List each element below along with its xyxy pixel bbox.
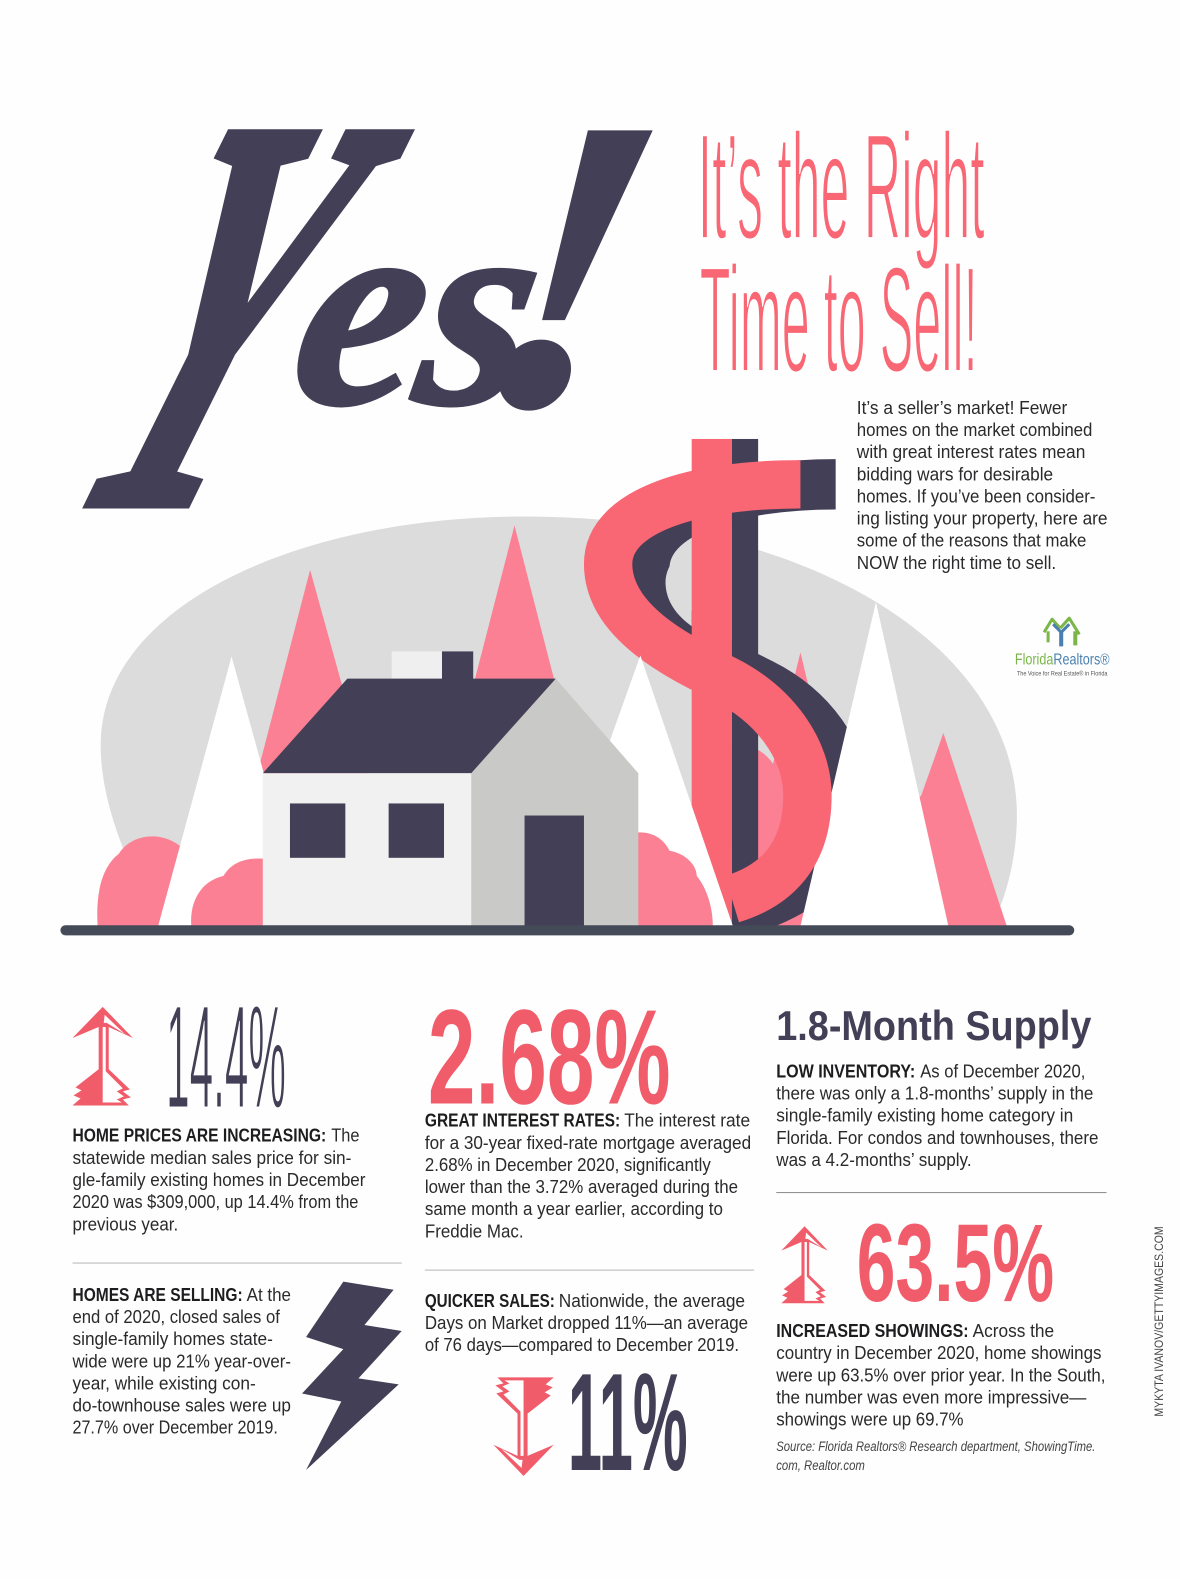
text: quicker sales: Nationwide, the average [559,1291,745,1311]
white tree tall right [800,602,948,926]
pink tree far right [805,733,1007,926]
text: home prices are increasing [72,1126,365,1234]
dollar sign bar [692,439,732,926]
round bush behind dollar [698,745,782,846]
text: increased showings: country in December 2020, home showings [776,1343,1101,1363]
house side wall [471,679,638,926]
text: homes are selling: do-townhouse sales were up [72,1396,291,1416]
text: home prices are increasing: HOME PRICES ARE INCREASING: [72,1126,326,1146]
right bush [634,832,713,926]
text: quicker sales [425,1291,748,1355]
intro paragraph: ing listing your property, here are [857,509,1108,529]
text: increased showings [775,1321,1105,1430]
text: homes are selling [72,1285,291,1438]
icon: up arrow [72,1007,133,1105]
photo credit: MYKYTA IVANOV/GETTYIMAGES.COM [1154,1226,1166,1417]
text: homes are selling: year, while existing con- [72,1373,256,1393]
title: Yes! script word: Y [13,1,464,626]
pink tree left of house [252,570,373,795]
second left bush [191,859,267,926]
text: increased showings: INCREASED SHOWINGS: [776,1321,969,1341]
text: home prices are increasing: previous year. [72,1214,178,1234]
text: quicker sales: of 76 days—compared to December 2019. [425,1335,739,1355]
text: increased showings: Across the [973,1321,1054,1341]
text: increased showings: were up 63.5% over prior year. In the South, [775,1365,1105,1385]
dollar sign shadow bar [732,439,758,926]
text: great interest rates: Freddie Mac. [425,1221,524,1241]
text: home prices are increasing: The [331,1126,359,1146]
intro paragraph: It’s a seller’s market! Fewer [857,398,1067,418]
white tree left [158,656,306,926]
stat: 1.8-Month Supply: 1.8-Month Supply [776,1003,1091,1049]
pink tree behind dollar [733,652,866,926]
stat: 2.68%: 2.68% [428,981,671,1132]
text: low inventory: was a 4.2-months’ supply. [775,1150,972,1170]
text: great interest rates: The interest rate [624,1111,750,1131]
text: great interest rates: GREAT INTEREST RATES: [425,1111,620,1131]
text: low inventory: Florida. For condos and townhouses, there [776,1128,1098,1148]
illustration: house and dollar sign scene [60,439,1074,935]
white tree center [544,655,733,926]
house roof [263,679,556,773]
title: It's the Right Time to Sell! [698,103,985,405]
text: great interest rates [425,1111,751,1241]
infographic canvas: 14.4% [166,976,286,1140]
title: Yes! script word: ! [449,35,691,492]
text: great interest rates: lower than the 3.72% averaged during the [425,1177,738,1197]
logo icon [1044,618,1079,646]
intro paragraph: homes on the market combined [857,420,1092,440]
text: homes are selling: end of 2020, closed sales of [72,1307,281,1327]
left bush [97,836,211,926]
dollar sign curve [608,484,807,899]
intro paragraph: homes. If you’ve been consider- [857,486,1095,506]
gray hill background [101,516,1017,926]
gray cutout inside dollar [666,542,692,626]
text: homes are selling: HOMES ARE SELLING: [72,1285,243,1305]
intro paragraph [856,398,1108,573]
text: low inventory: LOW INVENTORY: [776,1061,915,1081]
text: homes are selling: single-family homes state- [72,1329,273,1349]
text: great interest rates: same month a year earlier, according to [425,1199,723,1219]
text: great interest rates: 2.68% in December 2020, significantly [425,1155,712,1175]
text: low inventory: As of December 2020, [920,1061,1085,1081]
panel: home prices [72,976,365,1234]
text: homes are selling: At the [247,1285,291,1305]
text: homes are selling: wide were up 21% year-over- [72,1351,291,1371]
panel: increased showings [775,1202,1105,1473]
text: home prices are increasing: 2020 was $309,000, up 14.4% from the [72,1192,358,1212]
infographic canvas [60,129,1163,1476]
intro paragraph: bidding wars for desirable [857,464,1053,484]
logo: Florida Realtors: The Voice for Real Estate® in Florida [1017,670,1108,678]
source note: com, Realtor.com [776,1458,865,1473]
text: homes are selling: 27.7% over December 2019. [72,1418,278,1438]
text: home prices are increasing: statewide median sales price for sin- [72,1148,351,1168]
text: low inventory: there was only a 1.8-months’ supply in the [776,1083,1093,1103]
panel: low inventory [775,1003,1098,1170]
text: quicker sales: Days on Market dropped 11%—an average [425,1313,748,1333]
stat: 63.5%: 63.5% [857,1202,1054,1325]
icon: up arrow small [781,1226,828,1303]
text: low inventory: single-family existing home category in [776,1106,1073,1126]
text: increased showings: showings were up 69.7% [776,1410,964,1430]
house windows [290,803,444,858]
source note [776,1439,1095,1473]
chimney [392,651,473,680]
icon: down arrow [493,1377,554,1476]
house front wall [263,773,471,926]
text: increased showings: the number was even more impressive— [776,1388,1087,1408]
text: home prices are increasing: gle-family existing homes in December [72,1170,365,1190]
icon: lightning bolt [302,1282,402,1470]
panel: quicker sales: 11% [568,1345,688,1500]
text: low inventory [775,1061,1098,1170]
house door [525,816,584,926]
panel: great interest rates [425,981,751,1241]
intro paragraph: NOW the right time to sell. [857,553,1056,573]
source note: Source: Florida Realtors® Research department, ShowingTime. [776,1439,1095,1454]
ground line [60,925,1074,935]
text: great interest rates: for a 30-year fixed-rate mortgage averaged [425,1133,751,1153]
pink tree beside chimney [463,526,566,725]
intro paragraph: with great interest rates mean [856,442,1085,462]
title: Yes! script word: es [275,153,565,464]
logo: Florida Realtors [1015,618,1110,678]
panel: quicker sales [425,1291,748,1500]
panel: homes are selling [72,1282,402,1470]
logo: Florida Realtors: FloridaRealtors® [1015,651,1110,669]
dollar sign shadow curve [644,484,844,915]
text: quicker sales: QUICKER SALES: [425,1291,555,1311]
intro paragraph: some of the reasons that make [857,531,1086,551]
